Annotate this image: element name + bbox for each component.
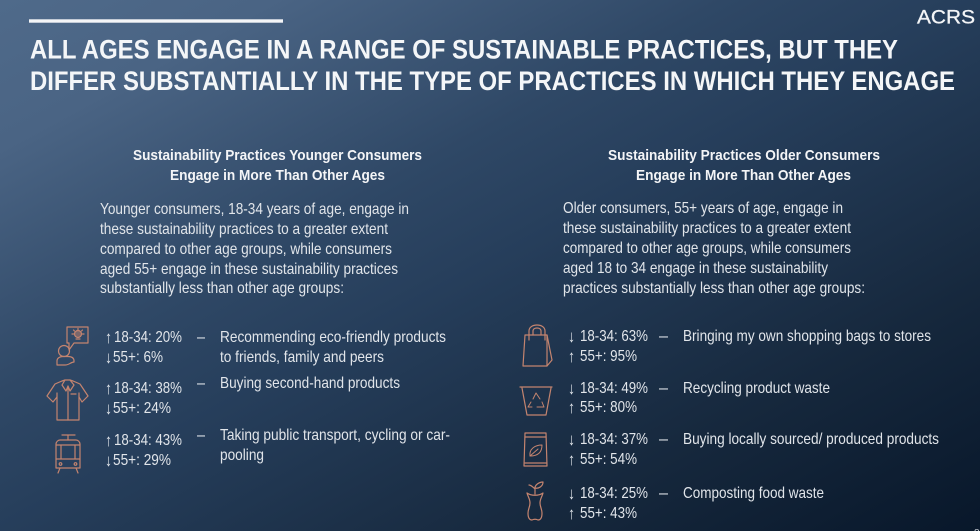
row: composting food waste: 18-34: 25% xyxy=(580,485,648,502)
text block: older consumers intro: practices substantially less than other age groups: xyxy=(563,280,865,297)
row: composting food waste xyxy=(568,484,824,523)
text block: older consumers intro: these sustainability practices to a greater extent xyxy=(563,220,851,237)
icon: shirt xyxy=(47,380,88,420)
row: recycling product waste xyxy=(568,379,830,417)
row: composting food waste: 55+: 43% xyxy=(580,505,637,522)
row: bringing own shopping bags: ↓ xyxy=(568,327,575,346)
icon: person with idea bubble xyxy=(57,327,88,365)
text block: younger consumers intro: these sustainability practices to a greater extent xyxy=(100,221,388,238)
panel: younger consumers xyxy=(47,147,450,473)
row: bringing own shopping bags: 55+: 95% xyxy=(580,348,637,365)
row: buying second-hand products xyxy=(105,375,400,418)
row: composting food waste: – xyxy=(659,485,668,502)
row: bringing own shopping bags: 18-34: 63% xyxy=(580,328,648,345)
heading: younger consumers: Sustainability Practices Younger Consumers xyxy=(133,147,422,164)
row: composting food waste: ↑ xyxy=(568,504,575,523)
row: composting food waste: ↓ xyxy=(568,484,575,503)
row: taking public transport: – xyxy=(197,427,205,444)
row: buying second-hand products: – xyxy=(197,375,205,392)
row: buying locally sourced products: – xyxy=(659,431,668,448)
row: taking public transport: 18-34: 43% xyxy=(114,432,182,449)
icon: tram xyxy=(56,435,80,473)
text block: younger consumers intro xyxy=(100,201,409,297)
row: recommending eco-friendly products: Recommending eco-friendly products xyxy=(220,329,446,346)
text block: younger consumers intro: Younger consumers, 18-34 years of age, engage in xyxy=(100,201,409,218)
row: buying second-hand products: Buying second-hand products xyxy=(220,375,400,392)
row: buying locally sourced products: ↓ xyxy=(568,430,575,449)
icon: shopping bag xyxy=(523,325,552,366)
text block: younger consumers intro: aged 55+ engage in these sustainability practices xyxy=(100,261,398,278)
row: recycling product waste: 18-34: 49% xyxy=(580,380,648,397)
row: bringing own shopping bags xyxy=(568,327,931,366)
panel: older consumers xyxy=(520,147,939,523)
icon: recycling bin xyxy=(520,387,552,415)
row: recommending eco-friendly products: ↓ xyxy=(105,348,112,367)
text block: older consumers intro: compared to other age groups, while consumers xyxy=(563,240,851,257)
row: taking public transport: pooling xyxy=(220,447,264,464)
icon: produce pack with leaf xyxy=(524,433,547,466)
text block: older consumers intro: Older consumers, 55+ years of age, engage in xyxy=(563,200,843,217)
row: bringing own shopping bags: – xyxy=(659,328,668,345)
row: buying locally sourced products: ↑ xyxy=(568,450,575,469)
heading: older consumers xyxy=(608,147,880,184)
row: taking public transport: ↓ xyxy=(105,451,112,470)
text block: younger consumers intro: compared to other age groups, while consumers xyxy=(100,241,392,258)
row: buying second-hand products: 55+: 24% xyxy=(113,400,171,417)
row: bringing own shopping bags: ↑ xyxy=(568,347,575,366)
row: buying locally sourced products xyxy=(568,430,939,469)
row: composting food waste: Composting food waste xyxy=(683,485,824,502)
heading: older consumers: Sustainability Practices Older Consumers xyxy=(608,147,880,164)
heading: older consumers: Engage in More Than Other Ages xyxy=(636,167,851,184)
row: recommending eco-friendly products xyxy=(105,328,446,367)
row: recommending eco-friendly products: 55+: 6% xyxy=(113,349,163,366)
text block: older consumers intro: aged 18 to 34 engage in these sustainability xyxy=(563,260,828,277)
title xyxy=(30,34,955,96)
heading: younger consumers xyxy=(133,147,422,184)
text block: older consumers intro xyxy=(563,200,865,297)
row: taking public transport: Taking public transport, cycling or car- xyxy=(220,427,450,444)
title: ALL AGES ENGAGE IN A RANGE OF SUSTAINABLE PRACTICES, BUT THEY xyxy=(30,34,898,64)
row: recycling product waste: ↓ xyxy=(568,379,575,398)
row: buying locally sourced products: 55+: 54% xyxy=(580,451,637,468)
row: buying locally sourced products: 18-34: 37% xyxy=(580,431,648,448)
row: recommending eco-friendly products: ↑ xyxy=(105,328,112,347)
row: buying second-hand products: ↑ xyxy=(105,379,112,398)
row: recommending eco-friendly products: to friends, family and peers xyxy=(220,349,384,366)
row: taking public transport xyxy=(105,427,450,470)
row: recycling product waste: 55+: 80% xyxy=(580,399,637,416)
row: recycling product waste: Recycling product waste xyxy=(683,380,830,397)
row: recycling product waste: ↑ xyxy=(568,398,575,417)
heading: younger consumers: Engage in More Than Other Ages xyxy=(170,167,385,184)
text block: younger consumers intro: substantially less than other age groups: xyxy=(100,280,344,297)
row: recommending eco-friendly products: 18-34: 20% xyxy=(114,329,182,346)
row: recycling product waste: – xyxy=(659,380,668,397)
row: taking public transport: ↑ xyxy=(105,431,112,450)
icon: apple core xyxy=(527,482,543,520)
row: buying second-hand products: ↓ xyxy=(105,399,112,418)
row: bringing own shopping bags: Bringing my own shopping bags to stores xyxy=(683,328,931,345)
row: buying second-hand products: 18-34: 38% xyxy=(114,380,182,397)
row: recommending eco-friendly products: – xyxy=(197,329,205,346)
row: buying locally sourced products: Buying locally sourced/ produced products xyxy=(683,431,939,448)
row: taking public transport: 55+: 29% xyxy=(113,452,171,469)
logo: ACRS: ACRS xyxy=(917,8,975,28)
